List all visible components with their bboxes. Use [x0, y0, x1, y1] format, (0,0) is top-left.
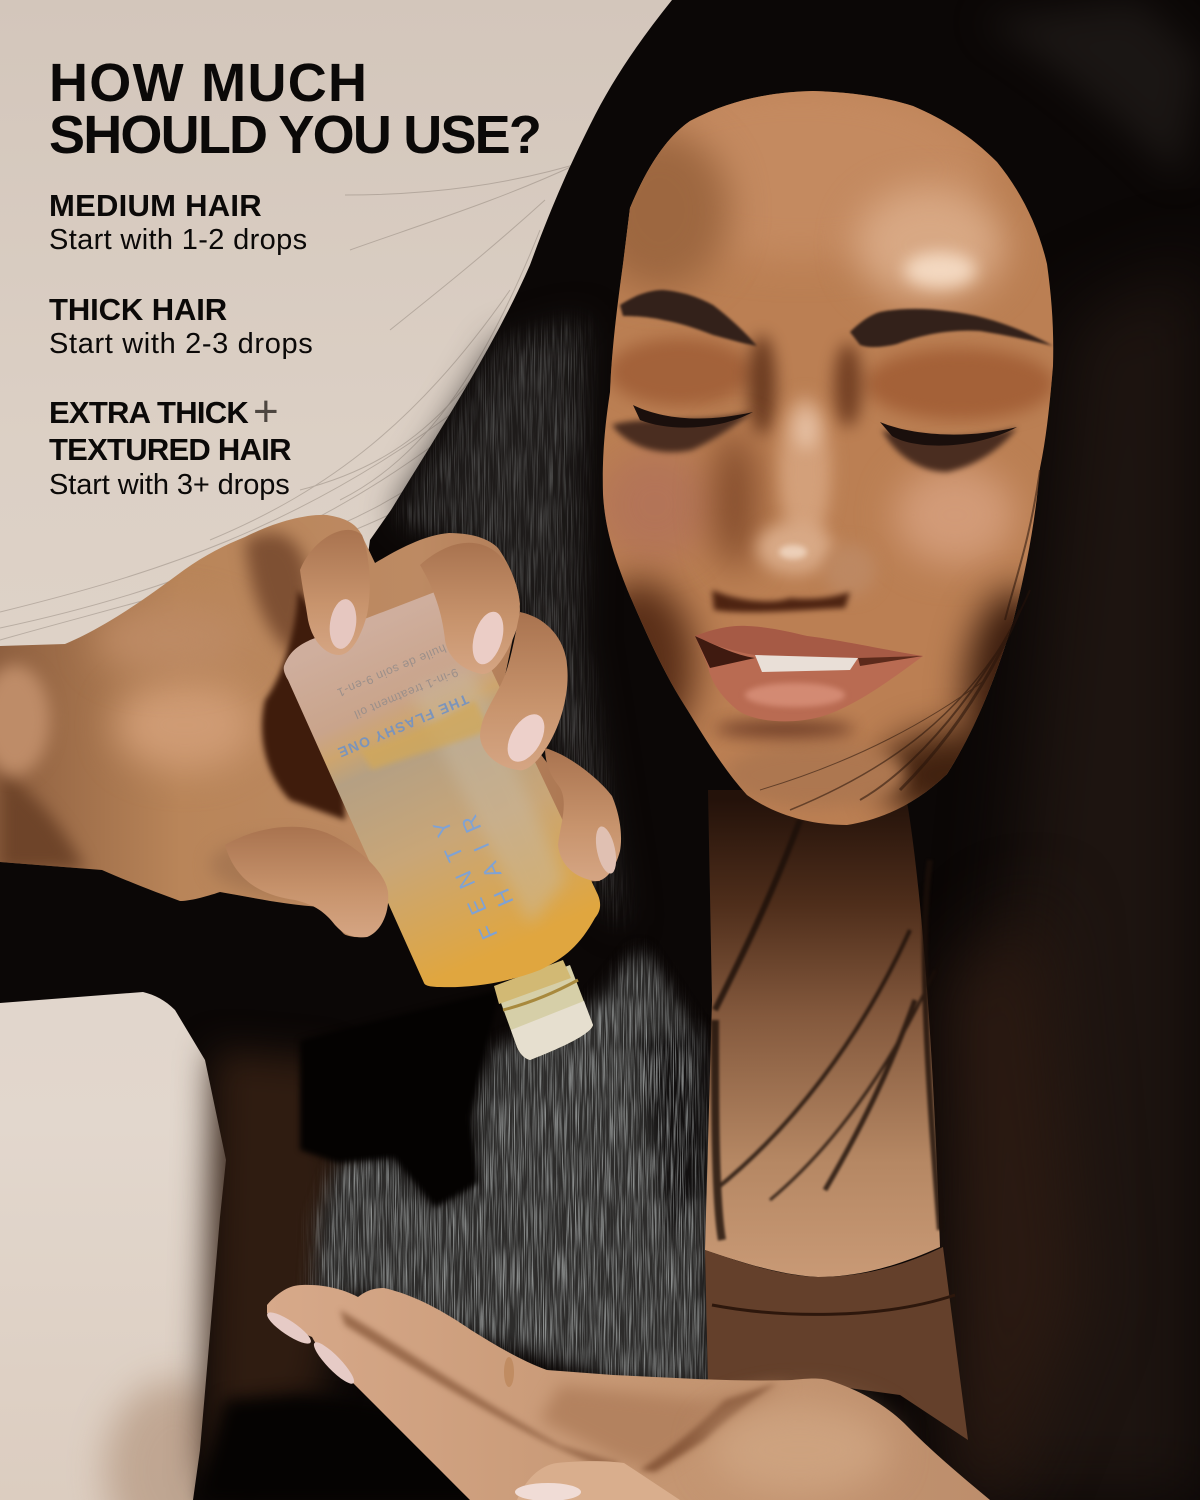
bottle body: [284, 588, 600, 987]
bottle light band: [410, 665, 565, 925]
sleeve brown tone: [205, 1050, 350, 1490]
right eye lid line: [880, 422, 1017, 446]
title: [49, 53, 540, 165]
bottle: [284, 588, 600, 1060]
right eye lashes: [882, 428, 1017, 472]
extra thick heading: +: [253, 387, 278, 436]
palm shading: [540, 1385, 790, 1470]
bottle neck: [494, 960, 571, 1004]
bottle logo: HAIR: [450, 798, 519, 910]
little finger: [545, 748, 621, 881]
lips: [695, 636, 922, 722]
cheeks: [602, 464, 694, 548]
finger fold: [340, 1310, 620, 1470]
finger web shadow: [245, 533, 310, 660]
brown top: [705, 1247, 968, 1440]
extra thick heading: EXTRA THICK: [49, 395, 248, 430]
ring finger: [480, 612, 568, 770]
oil drop: [504, 1357, 514, 1387]
thumb highlight: [710, 1405, 890, 1495]
hair shine streaks lower: [312, 950, 710, 1385]
face: [585, 80, 1065, 825]
neck and chest: [705, 790, 940, 1277]
jaw shadows: [585, 580, 695, 750]
fingers over bottle: [225, 530, 621, 937]
bottle label text: huile de soin 9-en-1: [335, 641, 448, 700]
upper hand and arm: [0, 515, 600, 937]
title: HOW MUCH: [49, 53, 368, 113]
strands over chest: [715, 820, 940, 1240]
extra thick heading: [49, 387, 291, 467]
flyaway hairs: [0, 160, 590, 640]
nose: [715, 430, 755, 570]
bottle gold patch: [360, 700, 490, 770]
index finger: [300, 530, 370, 655]
medium hair text: Start with 1-2 drops: [49, 224, 307, 256]
thick hair heading: THICK HAIR: [49, 292, 227, 327]
brows: [620, 290, 757, 346]
eyeshadow: [608, 338, 752, 406]
bottle label text: 9-in-1 treatment oil: [352, 665, 460, 722]
thumb: [225, 827, 388, 937]
palm highlight: [115, 680, 255, 770]
forearm shade: [0, 770, 85, 870]
left eye lashes: [612, 412, 753, 452]
hair shine streaks upper: [395, 320, 625, 930]
middle finger: [420, 543, 520, 674]
bottle logo: FENTY: [422, 804, 503, 943]
nails: [264, 1308, 314, 1348]
title: SHOULD YOU USE?: [49, 105, 540, 165]
thick hair text: Start with 2-3 drops: [49, 328, 313, 360]
wall shadow lower left: [105, 1380, 245, 1500]
right hair brown tone: [960, 260, 1200, 1500]
lower hand: [264, 1285, 990, 1500]
upper hair gloss: [395, 320, 625, 930]
bottle label text: THE FLASHY ONE: [335, 691, 471, 761]
fingernails: [327, 597, 359, 651]
bottle label text: [335, 641, 471, 761]
medium hair heading: MEDIUM HAIR: [49, 188, 262, 223]
black shadow under bottle: [300, 990, 500, 1207]
flyaway hairs over face: [760, 470, 1040, 810]
extra thick text: Start with 3+ drops: [49, 469, 290, 501]
extra thick heading: TEXTURED HAIR: [49, 432, 291, 467]
glossy hair base: [312, 950, 710, 1385]
bottle cap: [497, 965, 593, 1060]
left eye lid line: [633, 405, 753, 428]
